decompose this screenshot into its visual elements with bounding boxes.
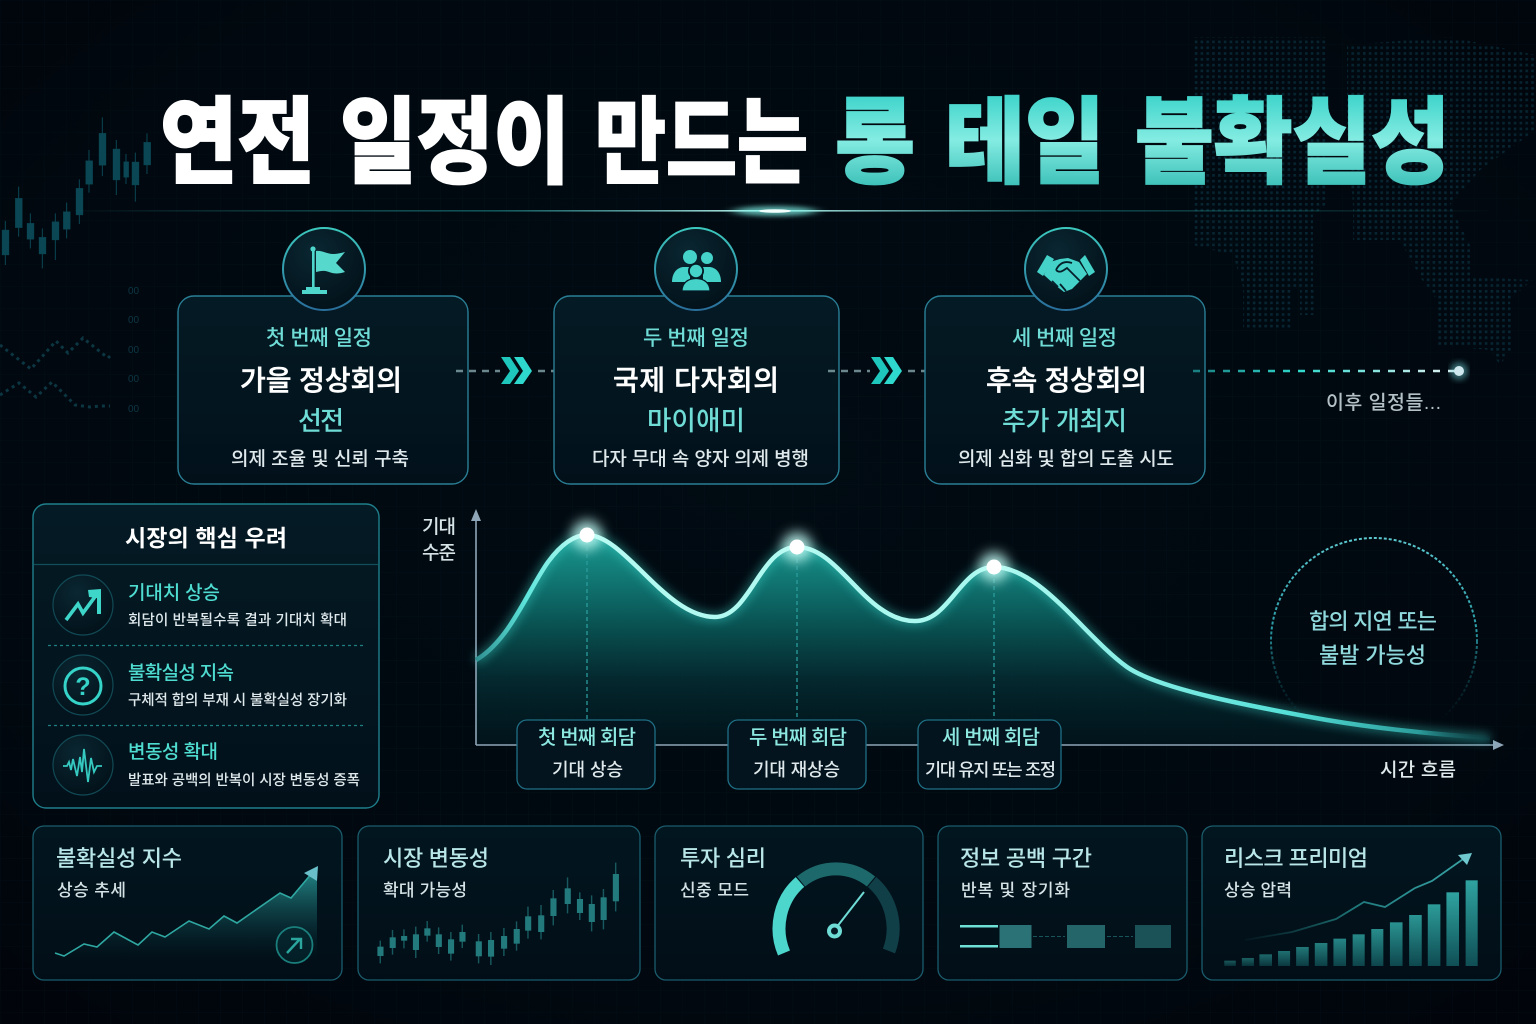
title: 일정이: [340, 90, 570, 195]
title: 만드는: [595, 90, 808, 195]
panel: uncertainty index: [33, 826, 342, 980]
text: information gap: [960, 846, 1092, 900]
icon: question mark: [53, 655, 113, 715]
callout: third talks: 세 번째 회담: [942, 726, 1040, 749]
curve line: [476, 535, 1490, 738]
text: uncertainty index: [56, 846, 182, 900]
text: investor sentiment: [680, 846, 766, 900]
title: 롱: [835, 90, 915, 195]
panel: first schedule: [178, 228, 468, 484]
text: uncertainty index: 상승 추세: [57, 881, 126, 900]
panel: third schedule: [925, 228, 1205, 484]
bar chart: [1224, 880, 1478, 966]
text: market volatility: [383, 846, 489, 900]
text: rising expectations: 기대치 상승: [128, 582, 220, 604]
title glow divider: [60, 206, 1500, 216]
text: third schedule subtitle: 추가 개최지: [1002, 406, 1127, 436]
text: third schedule label: 세 번째 일정: [1012, 327, 1117, 350]
text: risk premium: [1224, 846, 1368, 900]
text: first schedule subtitle: 선전: [298, 406, 344, 436]
gauge: [779, 869, 893, 953]
text: growing volatility: 발표와 공백의 반복이 시장 변동성 증폭: [128, 772, 360, 789]
text: x axis label: 시간 흐름: [1380, 759, 1456, 781]
background tick labels: 00: [128, 315, 140, 326]
panel: market volatility: [358, 826, 640, 980]
callout: second talks: [728, 720, 866, 789]
arrow: second to third: [828, 357, 938, 384]
callout: first talks: 기대 상승: [552, 760, 623, 780]
chart area fill: [476, 535, 1490, 745]
panel: second schedule: [554, 228, 839, 484]
text: market volatility: 확대 가능성: [383, 881, 467, 900]
text: second schedule description: 다자 무대 속 양자 의제 병행: [592, 448, 809, 470]
text: first schedule label: 첫 번째 일정: [266, 327, 372, 350]
text: growing volatility: [128, 741, 360, 789]
text: rising expectations: 회담이 반복될수록 결과 기대치 확대: [128, 612, 347, 629]
text: sustained uncertainty: 불확실성 지속: [128, 662, 234, 684]
trend arrow: [1245, 853, 1472, 940]
panel: risk premium: [1202, 826, 1501, 980]
panel: market concerns: [33, 504, 379, 808]
title: 테일: [945, 90, 1105, 195]
text: investor sentiment: 신중 모드: [680, 881, 749, 900]
background tick labels: 00: [128, 404, 140, 415]
text: y axis label: 수준: [422, 543, 456, 564]
world map dots: [1193, 37, 1536, 365]
icon: question mark: ?: [75, 673, 91, 701]
text: third schedule name: 후속 정상회의: [986, 365, 1147, 396]
background line series: [0, 338, 110, 407]
text: market volatility: 시장 변동성: [383, 846, 489, 871]
background candlesticks: [2, 117, 151, 268]
candlestick chart: [377, 863, 619, 965]
callout: second talks: 두 번째 회담: [749, 726, 847, 749]
text: sustained uncertainty: [128, 662, 347, 709]
text: third schedule description: 의제 심화 및 합의 도출 시도: [958, 448, 1174, 470]
icon: volatility wave: [53, 735, 113, 795]
callout: first talks: 첫 번째 회담: [538, 726, 636, 749]
text: sustained uncertainty: 구체적 합의 부재 시 불확실성 장기화: [128, 692, 347, 709]
text: second schedule name: 국제 다자회의: [613, 365, 779, 396]
text: risk premium: 상승 압력: [1224, 881, 1292, 900]
text: information gap: 정보 공백 구간: [960, 846, 1092, 871]
callout: delay or collapse circle: 불발 가능성: [1319, 643, 1426, 668]
text: investor sentiment: 투자 심리: [680, 846, 766, 871]
title: 불확실성: [1135, 90, 1450, 195]
curve glow: [476, 535, 1490, 738]
text: second schedule label: 두 번째 일정: [643, 327, 749, 350]
title: 연전: [160, 90, 315, 195]
text: later schedules: 이후 일정들...: [1326, 392, 1441, 414]
background tick labels: 00: [128, 286, 140, 297]
text: risk premium: 리스크 프리미엄: [1224, 846, 1368, 871]
callout: first talks: [517, 720, 655, 789]
line chart: uncertainty index: [55, 866, 318, 962]
icon: handshake: [1025, 228, 1107, 310]
arrow: first to second: [456, 357, 568, 384]
text: growing volatility: 변동성 확대: [128, 741, 218, 763]
peak markers: [572, 520, 1009, 582]
gap blocks: [960, 925, 1171, 948]
callout: second talks: 기대 재상승: [753, 760, 840, 780]
text: uncertainty index: 불확실성 지수: [56, 846, 182, 871]
peak guides: [587, 540, 994, 720]
text: second schedule subtitle: 마이애미: [647, 406, 745, 436]
background tick labels: [128, 286, 140, 415]
panel: information gap: [938, 826, 1187, 980]
text: y axis label: 기대: [422, 516, 456, 538]
callout: delay or collapse circle: [1271, 538, 1477, 744]
panel: investor sentiment: [655, 826, 923, 980]
callout: third talks: [918, 720, 1061, 789]
background tick labels: 00: [128, 345, 140, 356]
callout: third talks: 기대 유지 또는 조정: [925, 760, 1056, 780]
callout: delay or collapse circle: 합의 지연 또는: [1309, 609, 1437, 634]
axes: [471, 509, 1504, 750]
icon: rising trend: [53, 575, 113, 635]
text: information gap: 반복 및 장기화: [961, 881, 1070, 900]
icon: up arrow badge: [276, 927, 312, 963]
chart: expectation curve: [471, 509, 1504, 750]
icon: people: [655, 228, 737, 310]
text: y axis label: [422, 516, 456, 564]
icon: flag: [283, 228, 365, 310]
title: [160, 90, 1450, 195]
heading: market concerns: 시장의 핵심 우려: [125, 525, 287, 551]
arrow: future schedule timeline: [1193, 362, 1468, 380]
background tick labels: 00: [128, 374, 140, 385]
text: first schedule description: 의제 조율 및 신뢰 구축: [231, 448, 409, 470]
text: rising expectations: [128, 582, 347, 629]
text: first schedule name: 가을 정상회의: [240, 365, 402, 396]
